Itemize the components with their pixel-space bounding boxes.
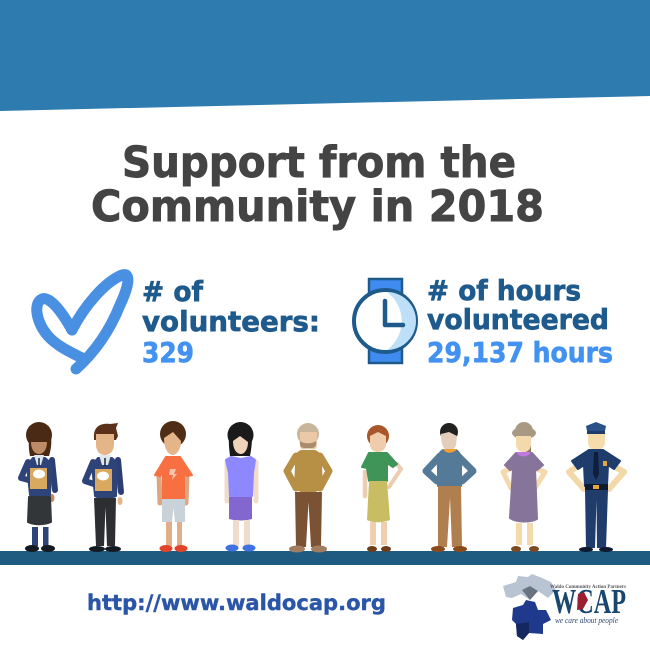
figure: older woman in purple dress <box>503 422 545 552</box>
logo: WCAP <box>503 574 626 640</box>
title: Community in 2018 <box>91 182 544 232</box>
hours stat <box>427 274 613 369</box>
logo map accent <box>577 592 588 610</box>
logo puzzle pieces <box>503 574 556 640</box>
figure: schoolgirl <box>21 422 55 552</box>
logo tagline: we care about people <box>555 615 618 625</box>
figure: older man with beard <box>287 423 329 552</box>
hours stat: # of hours <box>427 274 581 307</box>
icon: watch <box>354 279 416 363</box>
website url: http://www.waldocap.org <box>87 591 386 615</box>
volunteers stat: volunteers: <box>142 305 320 338</box>
figure: police officer <box>569 422 624 552</box>
figure: boy in orange t-shirt <box>155 421 192 552</box>
volunteers stat: # of <box>142 275 204 308</box>
icon: heart <box>37 275 128 369</box>
logo top line: Waldo Community Action Partners <box>550 584 626 590</box>
hours stat: volunteered <box>427 303 609 336</box>
ground bar <box>0 551 650 565</box>
figure: man in blue sweater <box>426 423 473 552</box>
volunteers stat <box>142 275 320 369</box>
top banner <box>0 0 650 111</box>
figure: schoolboy <box>85 423 122 552</box>
figure: woman in green top <box>362 425 401 552</box>
hours stat: 29,137 hours <box>427 336 613 369</box>
volunteers stat: 329 <box>142 336 194 369</box>
title: Support from the <box>122 138 516 188</box>
figure: girl in purple top <box>226 422 256 552</box>
title <box>91 138 544 232</box>
